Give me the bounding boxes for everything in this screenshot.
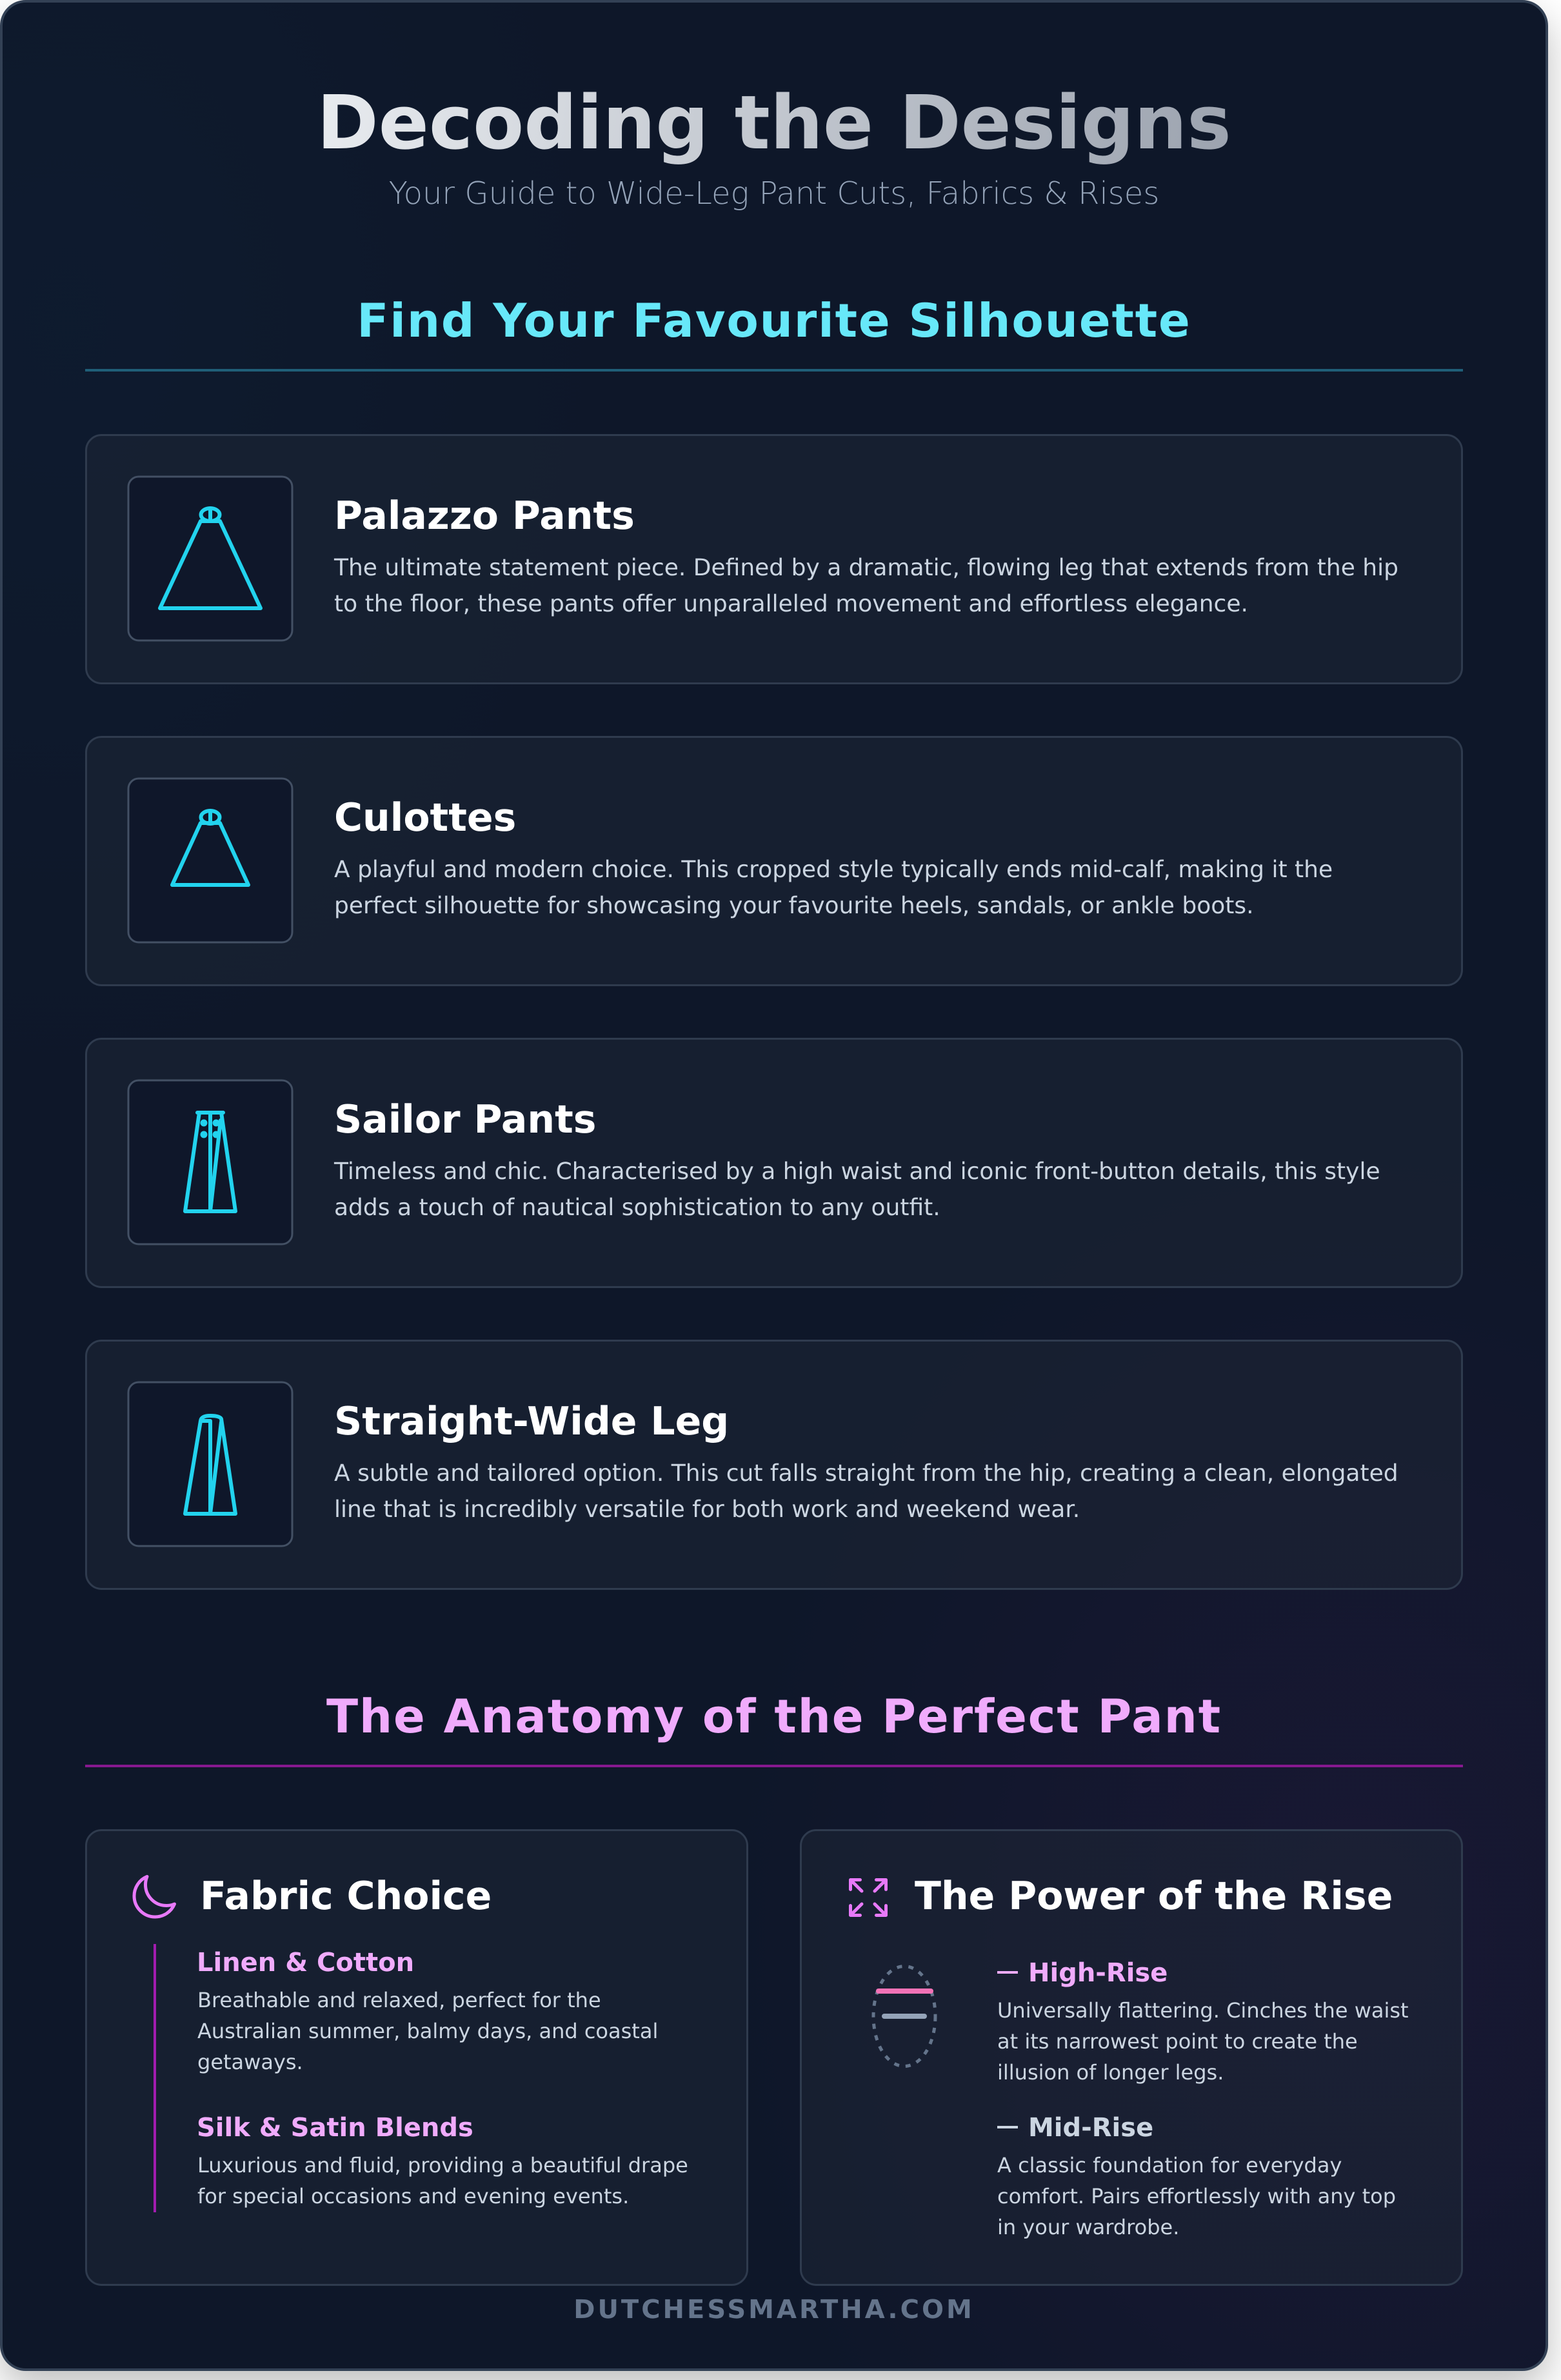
panel: straight-wide leg bbox=[86, 1340, 1462, 1589]
panel: sailor pants: adds a touch of nautical sophistication to any outfit. bbox=[334, 1195, 940, 1221]
panel: palazzo pants: Palazzo Pants bbox=[334, 493, 635, 539]
panel: culottes: perfect silhouette for showcasing your favourite heels, sandals, or ankle boots. bbox=[334, 893, 1254, 919]
panel: culottes: A playful and modern choice. This cropped style typically ends mid-calf, making it the bbox=[334, 857, 1333, 883]
icon: culottes bbox=[128, 778, 292, 942]
panel: power of the rise: The Power of the Rise bbox=[915, 1874, 1393, 1919]
text block: high-rise: at its narrowest point to create the bbox=[997, 2029, 1358, 2054]
panel: straight-wide leg: A subtle and tailored option. This cut falls straight from the hip, creating a clean, elongated bbox=[334, 1460, 1398, 1487]
panel: palazzo pants bbox=[86, 435, 1462, 684]
text block: linen and cotton bbox=[197, 1948, 658, 2074]
text block: linen and cotton: Breathable and relaxed, perfect for the bbox=[197, 1988, 601, 2012]
text block: linen and cotton: Linen & Cotton bbox=[197, 1948, 414, 1978]
panel: culottes: Culottes bbox=[334, 795, 516, 840]
text block: silk and satin blends: Luxurious and fluid, providing a beautiful drape bbox=[197, 2153, 688, 2177]
panel: power of the rise bbox=[801, 1830, 1462, 2285]
icon: rise diagram bbox=[873, 1966, 935, 2067]
section heading: anatomy: The Anatomy of the Perfect Pant bbox=[326, 1689, 1222, 1743]
section heading: silhouette: Find Your Favourite Silhouette bbox=[357, 293, 1191, 348]
icon: expand arrows bbox=[850, 1879, 886, 1915]
icon: straight-wide leg bbox=[128, 1382, 292, 1546]
text block: mid-rise bbox=[997, 2113, 1396, 2239]
text block: mid-rise: in your wardrobe. bbox=[997, 2215, 1179, 2239]
panel: fabric choice bbox=[86, 1830, 747, 2285]
text block: silk and satin blends: for special occasions and evening events. bbox=[197, 2184, 629, 2208]
text block: high-rise: Universally flattering. Cinches the waist bbox=[997, 1998, 1409, 2023]
text block: high-rise: High-Rise bbox=[1028, 1958, 1168, 1988]
panel: sailor pants: Sailor Pants bbox=[334, 1097, 596, 1142]
text block: silk and satin blends: Silk & Satin Blends bbox=[197, 2113, 473, 2143]
panel: palazzo pants: to the floor, these pants offer unparalleled movement and effortless elegance. bbox=[334, 591, 1248, 617]
title: Decoding the Designs bbox=[317, 80, 1231, 166]
panel: fabric choice: Fabric Choice bbox=[200, 1874, 492, 1919]
icon: sailor pants bbox=[128, 1080, 292, 1244]
text block: linen and cotton: getaways. bbox=[197, 2050, 303, 2074]
text block: linen and cotton: Australian summer, balmy days, and coastal bbox=[197, 2019, 658, 2043]
text block: high-rise: illusion of longer legs. bbox=[997, 2060, 1224, 2085]
icon: moon bbox=[134, 1876, 174, 1917]
subtitle: Your Guide to Wide-Leg Pant Cuts, Fabrics & Rises bbox=[389, 175, 1159, 212]
panel: straight-wide leg: line that is incredibly versatile for both work and weekend wear. bbox=[334, 1496, 1080, 1523]
panel: culottes bbox=[86, 737, 1462, 986]
panel: sailor pants: Timeless and chic. Characterised by a high waist and iconic front-button details, this style bbox=[333, 1158, 1380, 1185]
section heading: silhouette bbox=[85, 293, 1463, 372]
text block: mid-rise: A classic foundation for everyday bbox=[997, 2153, 1342, 2177]
panel: palazzo pants: The ultimate statement piece. Defined by a dramatic, flowing leg that extends from the hip bbox=[333, 555, 1398, 581]
section heading: anatomy bbox=[85, 1689, 1463, 1767]
text block: mid-rise: Mid-Rise bbox=[1028, 2113, 1153, 2143]
footer: DUTCHESSMARTHA.COM bbox=[573, 2295, 975, 2325]
text block: high-rise bbox=[997, 1958, 1409, 2085]
text block: silk and satin blends bbox=[197, 2113, 688, 2208]
panel: sailor pants bbox=[86, 1038, 1462, 1287]
icon: palazzo pants bbox=[128, 477, 292, 640]
text block: mid-rise: comfort. Pairs effortlessly with any top bbox=[997, 2184, 1396, 2208]
panel: straight-wide leg: Straight-Wide Leg bbox=[334, 1399, 729, 1444]
